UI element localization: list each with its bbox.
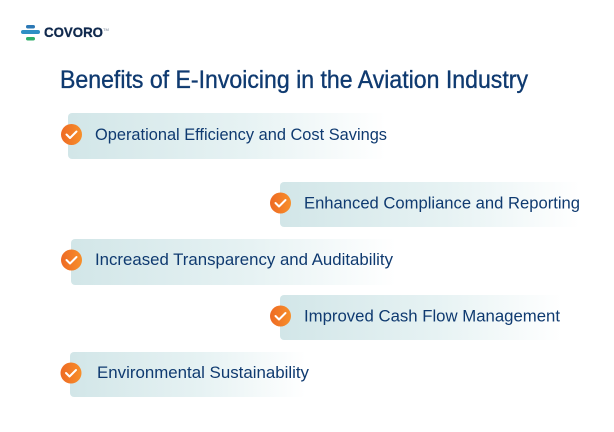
panel: cash flow xyxy=(270,295,562,340)
title: Benefits of E-Invoicing in the Aviation Industry xyxy=(60,66,528,94)
icon: check xyxy=(61,124,82,145)
panel: operational efficiency xyxy=(61,113,387,159)
panel: transparency xyxy=(61,239,396,285)
panel: sustainability xyxy=(60,352,309,397)
label: Increased Transparency and Auditability xyxy=(95,250,393,269)
label: Operational Efficiency and Cost Savings xyxy=(95,125,387,144)
icon: check xyxy=(270,306,291,326)
trademark: TM xyxy=(103,27,109,32)
icon: check xyxy=(270,192,291,214)
panel: enhanced compliance xyxy=(270,182,580,227)
label: Enhanced Compliance and Reporting xyxy=(304,194,580,212)
logo wordmark: COVORO xyxy=(44,24,103,40)
logo: Covoro xyxy=(21,24,109,40)
icon: check xyxy=(60,362,82,384)
label: Improved Cash Flow Management xyxy=(304,306,560,326)
icon: check xyxy=(61,250,82,270)
icon: logo bars xyxy=(21,25,40,40)
label: Environmental Sustainability xyxy=(97,363,309,382)
